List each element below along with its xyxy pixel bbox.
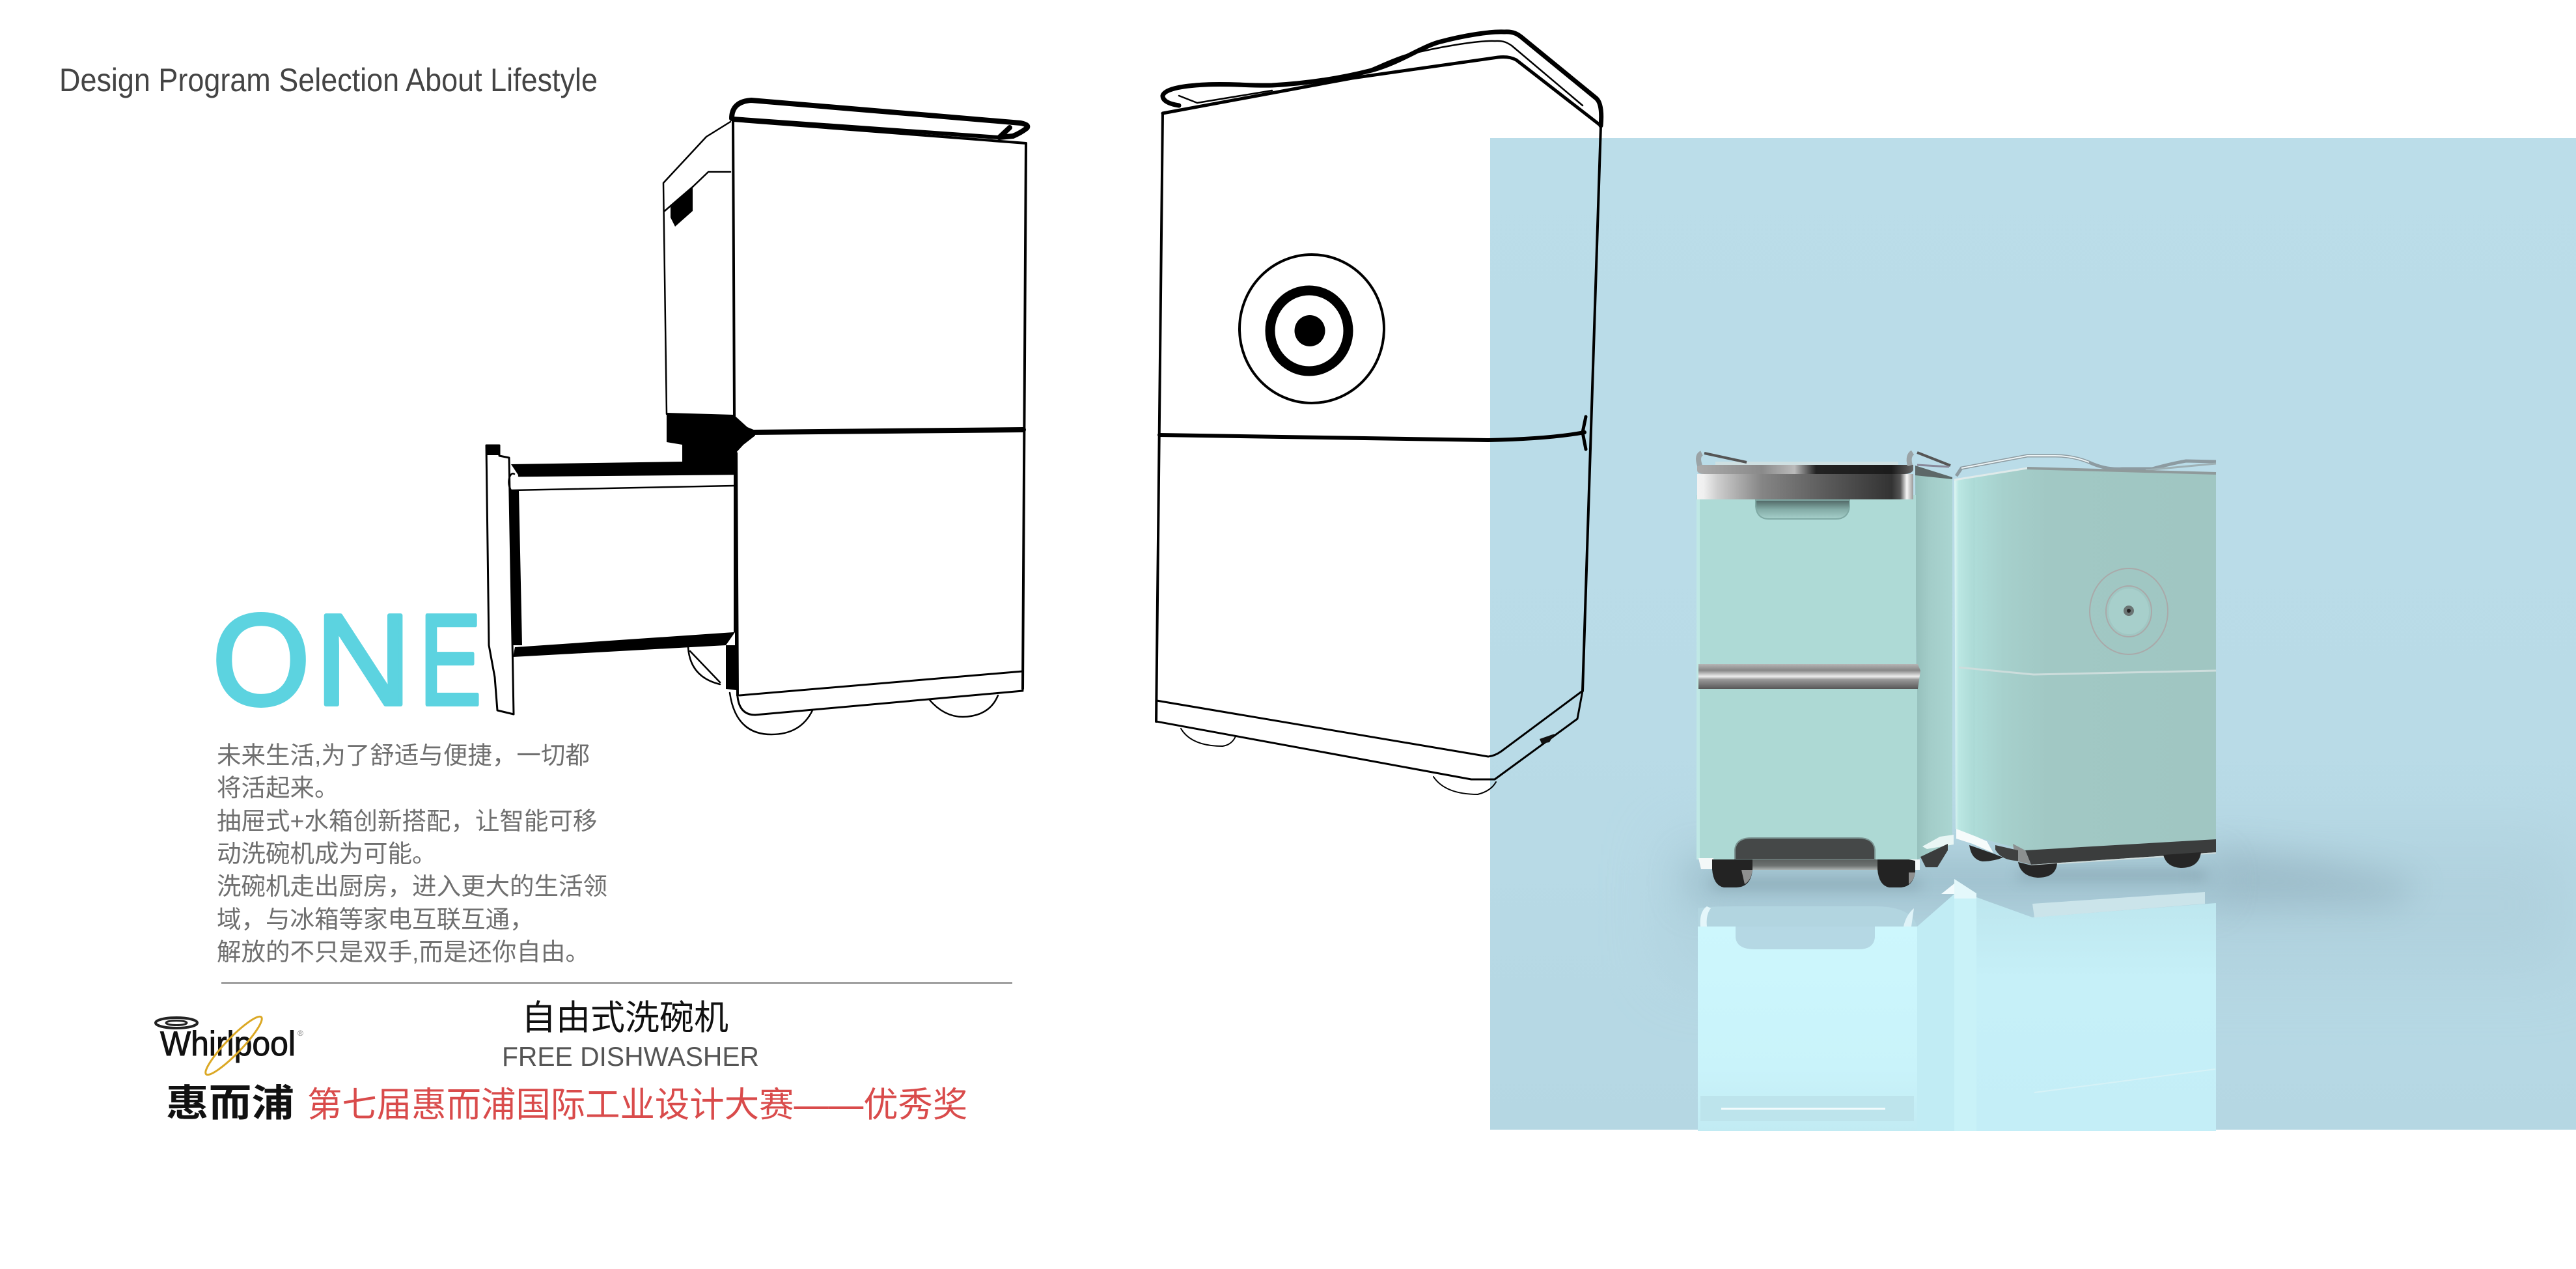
feet [1181,729,1496,794]
product render: left cabinet (drawer view) [1697,453,1954,887]
middle seam [751,430,1023,432]
middle chrome band [1698,664,1920,689]
heading: ONE [212,587,482,732]
top handles [1698,453,1950,467]
description text: 动洗碗机成为可能。 [217,840,436,867]
wire handle [1956,456,2216,476]
drawer rail [508,473,734,490]
axle bar [1741,859,1879,870]
brand name: 惠而浦 [166,1083,294,1124]
front upper door [1697,495,1916,665]
logo: Whirlpool: Whirlpool [160,1025,296,1063]
heading: ONE: N [315,587,411,732]
line drawing: open-drawer dishwasher [486,100,1027,734]
description text: 未来生活,为了舒适与便捷，一切都 [217,742,590,769]
icon: gold ring [201,1012,267,1080]
description text [217,742,607,966]
recessed handle [1756,500,1849,519]
black joint block [511,413,755,476]
panel: blue backdrop [1490,138,2576,1130]
middle seam [1159,432,1585,440]
description text: 将活起来。 [217,774,339,802]
product name: 自由式洗碗机 [521,999,728,1037]
product name in English: FREE DISHWASHER [502,1041,759,1072]
rear cabinet [663,122,730,414]
dial rings [2090,568,2168,654]
narrow side [1954,476,1976,837]
heading: ONE: E [419,587,482,732]
seam [1959,667,2216,675]
top handle [732,100,1027,137]
floor shadow [1672,831,2444,940]
base and bottom [738,671,1023,715]
base [1156,691,1583,779]
cabinet outline [733,120,1026,695]
heading: ONE: O [212,587,310,732]
white corner trim [1956,829,1993,853]
base cut-out [1735,838,1875,859]
wheels [2018,862,2057,878]
title: Design Program Selection About Lifestyle [59,62,598,98]
description text: 域，与冰箱等家电互联互通， [217,906,534,933]
description text: 抽屉式+水箱创新搭配，让智能可移 [217,807,597,835]
logo: Whirlpool [156,1012,303,1080]
corner trim [1698,858,1713,869]
award line: 第七届惠而浦国际工业设计大赛——优秀奖 [307,1086,967,1124]
base strip [2025,839,2216,865]
product render: floor reflection [1698,879,2216,1131]
front lower door [1697,688,1917,859]
handle recess [671,187,693,227]
drawer box sides [509,479,522,645]
description text: 解放的不只是双手,而是还你自由。 [217,938,590,966]
side panel [1915,474,1952,859]
cabinet outline [1163,57,1601,126]
top chrome band [1697,474,1913,499]
wheels [688,647,998,734]
top chrome lip [1697,465,1913,474]
logo: Whirlpool: ® [298,1029,303,1038]
top edge [1954,468,2027,480]
main face [1975,468,2216,850]
rear wheel [1920,844,1948,867]
dial rings [1240,255,1384,403]
description text: 洗碗机走出厨房，进入更大的生活领 [217,872,607,900]
line drawing: side view with dial [1156,32,1601,794]
icon: swirl [156,1018,197,1028]
drawer front panel [486,445,514,714]
top handle [1163,32,1601,126]
product render: right cabinet (side view) [1954,456,2216,878]
wheels [1712,859,1752,887]
top plate [1715,462,1898,466]
